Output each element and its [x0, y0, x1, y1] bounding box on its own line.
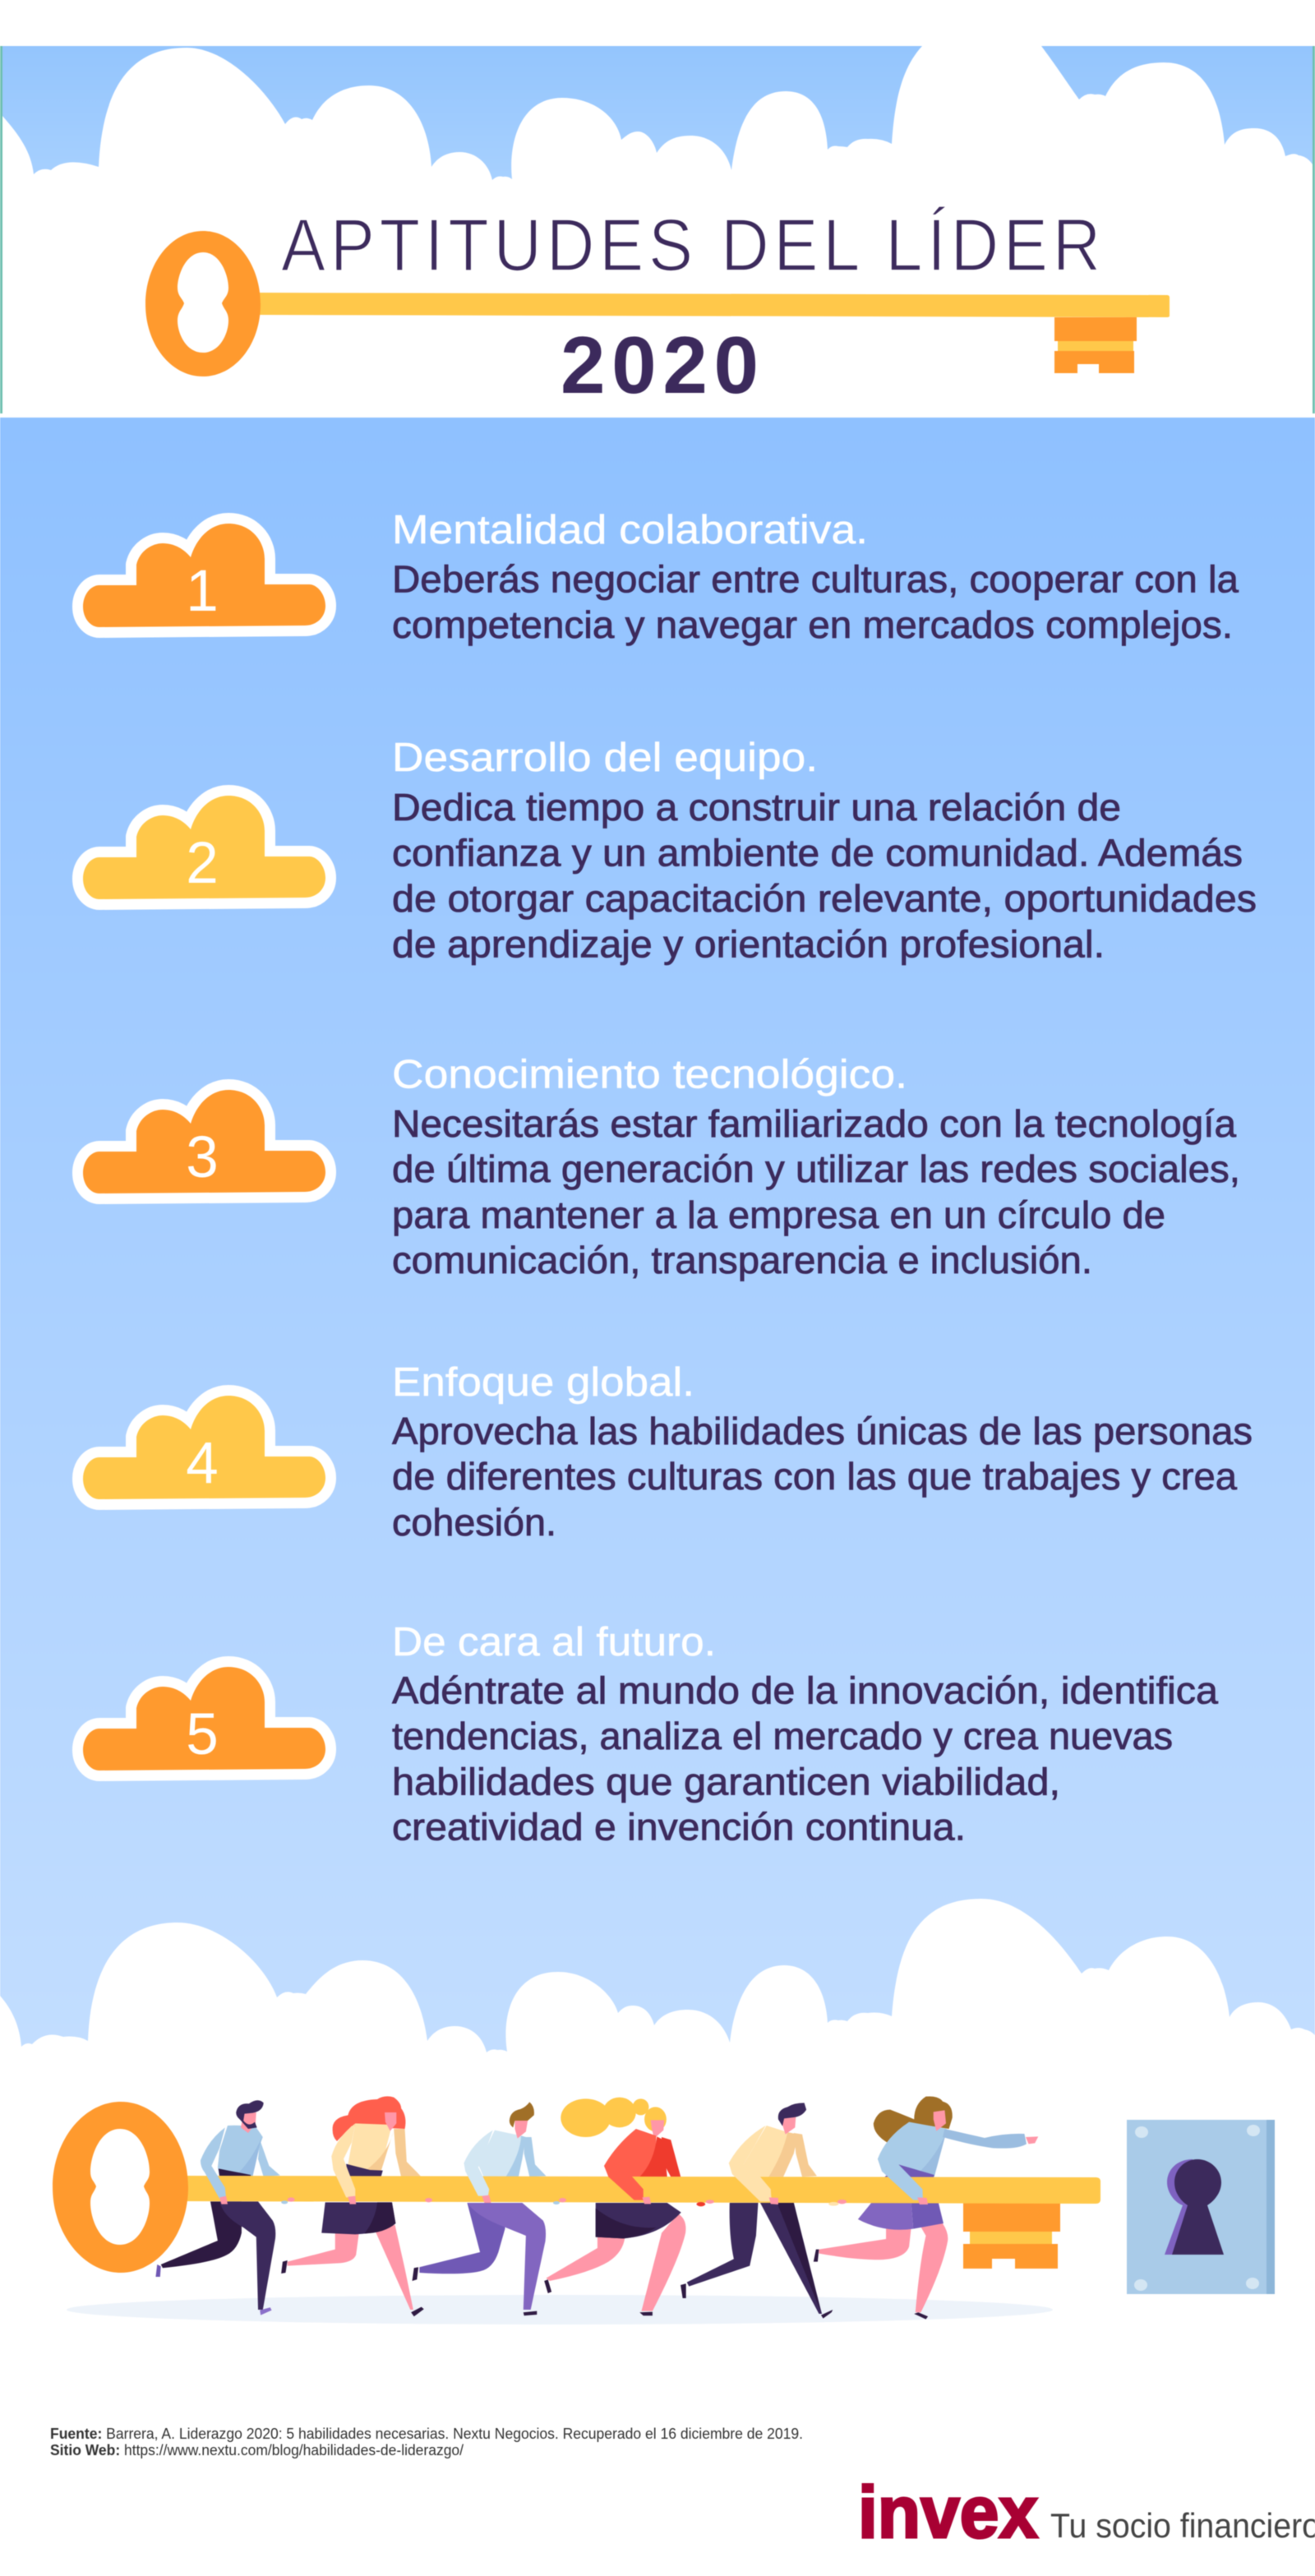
item 2 heading: Desarrollo del equipo. — [392, 736, 818, 780]
invex logo: invex — [858, 2471, 1038, 2553]
item 5 — [83, 1620, 1218, 1849]
item 2 — [83, 736, 1257, 965]
lock plate — [1127, 2120, 1275, 2294]
header clouds — [2, 46, 1313, 413]
source note: Sitio Web: https://www.nextu.com/blog/habilidades-de-liderazgo/ — [50, 2442, 464, 2458]
item 5 text: creatividad e invención continua. — [392, 1806, 966, 1849]
item 2 text: confianza y un ambiente de comunidad. Además — [392, 832, 1243, 875]
source note — [50, 2426, 803, 2458]
item 3 text: comunicación, transparencia e inclusión. — [392, 1239, 1092, 1281]
person 4 body — [544, 2098, 685, 2315]
item 4 — [83, 1360, 1253, 1544]
keyhole — [1165, 2159, 1224, 2255]
item 3 heading: Conocimiento tecnológico. — [392, 1053, 907, 1097]
cloud badge 5: 5 — [186, 1702, 219, 1767]
cloud badge 3: 3 — [186, 1125, 219, 1190]
item 2 text — [392, 786, 1257, 965]
item 3 text: Necesitarás estar familiarizado con la tecnología — [392, 1102, 1236, 1145]
person 5 body — [681, 2103, 833, 2319]
person 1 body — [155, 2100, 280, 2315]
cloud badge 5 — [83, 1667, 325, 1770]
item 2 text: Dedica tiempo a construir una relación de — [392, 786, 1121, 829]
item 4 text: de diferentes culturas con las que trabajes y crea — [392, 1455, 1237, 1498]
item 1 heading: Mentalidad colaborativa. — [392, 508, 868, 552]
item 3 text: para mantener a la empresa en un círculo de — [392, 1193, 1165, 1236]
person 3 body — [412, 2102, 546, 2315]
source note: Fuente: Barrera, A. Liderazgo 2020: 5 habilidades necesarias. Nextu Negocios. Recuperado el 16 diciembre de 2019. — [50, 2426, 803, 2442]
cloud badge 2 — [83, 796, 325, 899]
item 5 text: tendencias, analiza el mercado y crea nuevas — [392, 1715, 1173, 1757]
item 3 — [83, 1053, 1240, 1281]
item 5 text: habilidades que garanticen viabilidad, — [392, 1761, 1060, 1803]
item 1 text: competencia y navegar en mercados complejos. — [392, 603, 1233, 646]
people behind key, last two — [681, 2096, 1038, 2320]
header key icon — [145, 231, 1170, 376]
key shaft bottom — [181, 2176, 1100, 2204]
item 2 text: de otorgar capacitación relevante, oportunidades — [392, 877, 1257, 920]
item 4 text: Aprovecha las habilidades únicas de las personas — [392, 1410, 1253, 1452]
header panel — [0, 46, 1315, 413]
person 6 body — [814, 2096, 1038, 2320]
cloud badge 3 — [83, 1090, 325, 1193]
invex logo — [858, 2471, 1315, 2553]
key bit bottom — [963, 2203, 1060, 2269]
item 1 — [83, 508, 1239, 646]
cloud badge 4: 4 — [186, 1431, 219, 1496]
person 2 body — [281, 2096, 424, 2316]
key head bottom — [53, 2102, 188, 2273]
item 1 text: Deberás negociar entre culturas, cooperar con la — [392, 557, 1239, 600]
item 4 text — [392, 1410, 1253, 1544]
cloud badge 1 — [83, 524, 325, 627]
cloud badge 1: 1 — [186, 559, 219, 624]
item 3 text — [392, 1102, 1240, 1281]
item 4 heading: Enfoque global. — [392, 1360, 694, 1405]
year: 2020 — [561, 320, 759, 410]
item 1 text — [392, 557, 1239, 646]
item 5 heading: De cara al futuro. — [392, 1620, 716, 1664]
cloud badge 4 — [83, 1396, 325, 1499]
title: APTITUDES DEL LÍDER — [281, 204, 1100, 287]
ground shadow — [67, 2295, 1053, 2324]
item 4 text: cohesión. — [392, 1501, 556, 1544]
main sky panel — [0, 418, 1315, 2063]
item 2 text: de aprendizaje y orientación profesional. — [392, 922, 1105, 965]
bottom clouds — [0, 1899, 1315, 2576]
item 5 text — [392, 1669, 1218, 1849]
item 3 text: de última generación y utilizar las redes sociales, — [392, 1147, 1240, 1190]
people behind key, first four — [155, 2096, 685, 2316]
people front arms, last two — [706, 2122, 928, 2206]
item 5 text: Adéntrate al mundo de la innovación, identifica — [392, 1669, 1218, 1711]
cloud badge 2: 2 — [186, 831, 219, 896]
people front arms, first four — [201, 2123, 705, 2206]
